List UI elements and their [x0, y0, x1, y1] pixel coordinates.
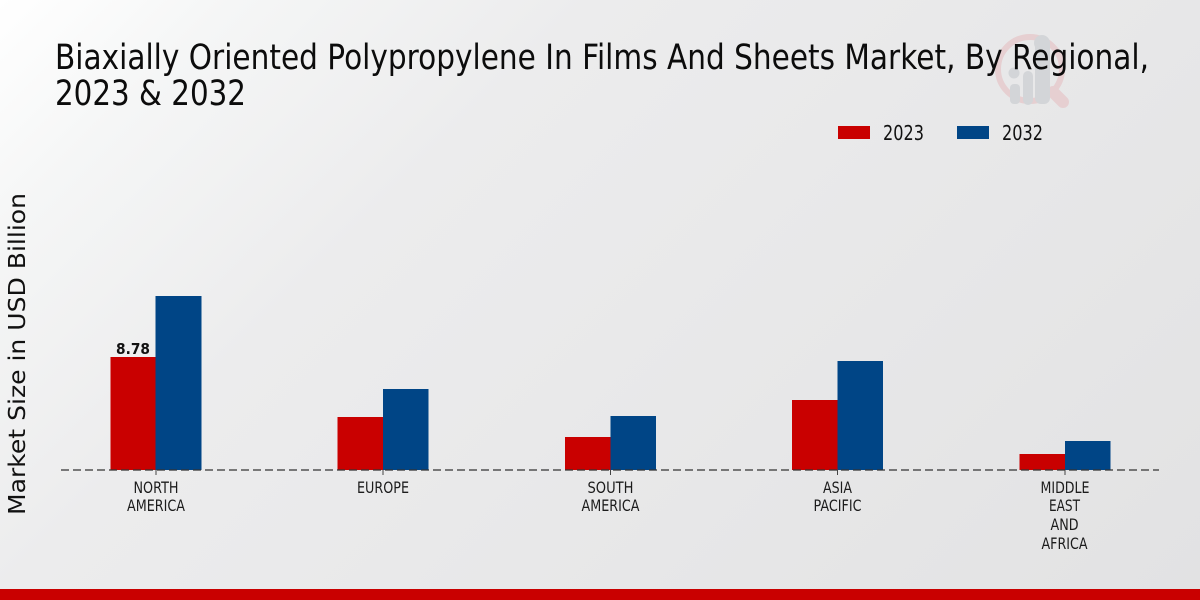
- legend item: 2032: [957, 121, 1043, 145]
- label: Asia Pacific: [814, 478, 862, 515]
- footer bar: [0, 589, 1200, 600]
- label: Asia Pacific: ASIA: [823, 478, 852, 497]
- label: South America: SOUTH: [588, 478, 634, 497]
- label: Asia Pacific: PACIFIC: [814, 496, 862, 515]
- data label: 8.78: 8.78: [116, 340, 150, 358]
- title: [55, 38, 1149, 114]
- legend: [838, 121, 1043, 145]
- category labels: [127, 478, 1090, 553]
- label: Middle East and Africa: EAST: [1049, 496, 1080, 515]
- label: Middle East and Africa: [1040, 478, 1090, 553]
- bars: North America: [110, 296, 202, 470]
- label: South America: AMERICA: [582, 496, 640, 515]
- label: North America: AMERICA: [127, 496, 185, 515]
- x axis baseline: [61, 469, 1159, 471]
- label: North America: NORTH: [134, 478, 178, 497]
- bars: Asia Pacific: [792, 361, 883, 470]
- legend item: 2032: 2032: [1002, 121, 1043, 145]
- bars: Middle East and Africa: [1020, 441, 1110, 470]
- title: 2023 & 2032: [55, 74, 246, 114]
- y axis label: Market Size in USD Billion: [5, 193, 31, 515]
- bars: Europe: [338, 389, 428, 470]
- legend item: 2023: 2023: [883, 121, 924, 145]
- label: Europe: EUROPE: [357, 478, 409, 497]
- bar chart: [61, 296, 1159, 553]
- label: North America: [127, 478, 185, 515]
- label: South America: [582, 478, 640, 515]
- label: Middle East and Africa: MIDDLE: [1040, 478, 1090, 497]
- legend item: 2023: [838, 121, 924, 145]
- label: Middle East and Africa: AFRICA: [1042, 534, 1088, 553]
- label: Middle East and Africa: AND: [1050, 515, 1078, 534]
- icon: watermark logo: [998, 35, 1063, 105]
- bars: South America: [565, 416, 656, 470]
